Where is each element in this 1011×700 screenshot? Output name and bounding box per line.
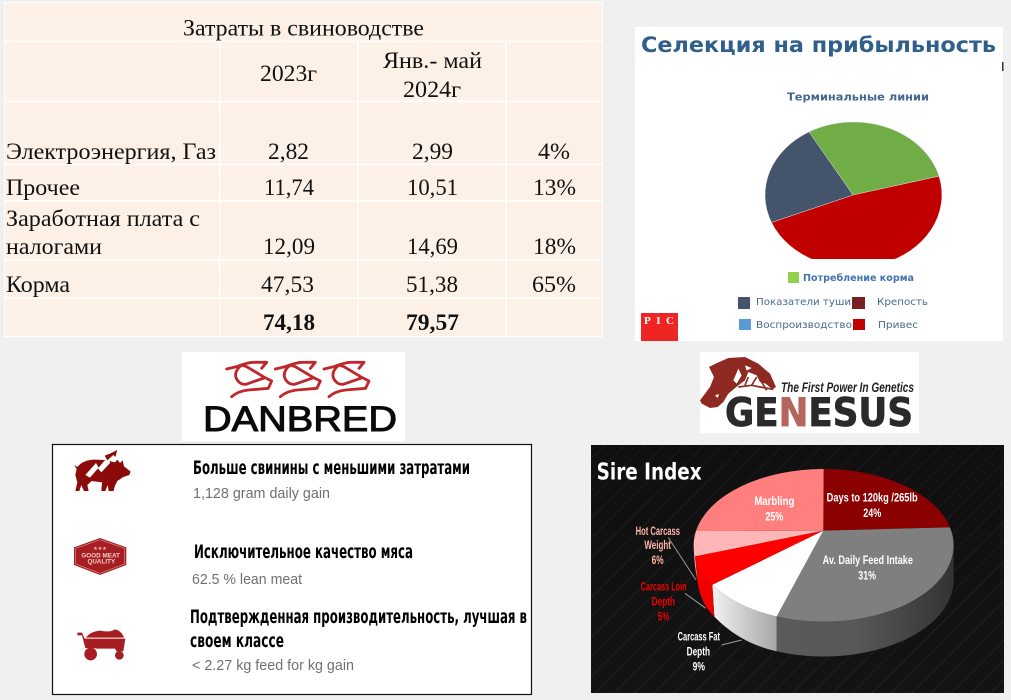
icon: PIC logo [641,313,678,341]
row: other: 10,51 [407,175,458,200]
row: electricity and gas: 4% [538,139,570,164]
row: totals: 74,18 [263,310,315,335]
row: wages with taxes: налогами [6,234,102,259]
row: electricity and gas: Электроэнергия, Газ [6,139,216,164]
legend: Крепость [877,297,928,308]
row: wages with taxes: Заработная плата с [6,206,200,231]
3D pie chart [694,469,954,656]
row: feed: 47,53 [261,272,314,297]
row: totals [263,310,459,335]
row: other: 13% [533,175,576,200]
metric: lean meat: 62.5 % lean meat [192,572,302,588]
label: carcass loin depth: Carcass Loin [641,580,687,594]
row: feed [6,272,576,297]
pie chart: terminal lines [765,122,942,268]
label: average daily feed intake: Av. Daily Feed Intake [823,553,913,567]
row: feed: Корма [6,272,70,297]
label: hot carcass weight [636,524,680,567]
panel: cost table [4,2,603,337]
icon: pig with growth arrow [74,450,131,491]
icon: good meat quality badge: GOOD MEAT [81,553,120,560]
label: days to 120kg [827,491,918,520]
heading: Sire Index: Sire Index [597,459,702,485]
icon: three red pig outlines [227,362,369,397]
row: electricity and gas [6,139,570,164]
heading: proven performance: Подтвержденная производительность, лучшая в [190,607,527,628]
label: marbling [754,494,794,523]
wordmark: DANBRED [203,400,397,439]
column header: January to May 2024 [383,48,482,102]
label: carcass fat depth: Carcass Fat [678,630,720,644]
icon: good meat quality badge: QUALITY [87,559,116,566]
heading: proven performance: своем классе [190,631,284,652]
label: days to 120kg: Days to 120kg /265lb [827,491,918,505]
icon: feed cart [77,629,125,660]
label: marbling: Marbling [754,494,794,508]
label: days to 120kg: 24% [863,506,882,520]
icon: boar head [700,357,776,408]
icon: PIC logo: PIC [644,315,674,327]
panel heading: Селекция на прибыльность [641,33,996,58]
label: carcass loin depth [641,580,687,623]
row: electricity and gas: 2,99 [412,139,453,164]
label: average daily feed intake: 31% [858,568,876,582]
heading: proven performance [190,607,527,652]
label: carcass fat depth: 9% [693,659,705,673]
label: carcass loin depth: Depth [652,595,675,609]
legend: Воспроизводство [756,320,852,331]
row: feed: 65% [532,272,576,297]
panel: Danbred benefits [52,444,532,694]
row: feed: 51,38 [406,272,458,297]
label: marbling: 25% [765,509,784,523]
icon: good meat quality badge: ★★★ [93,546,107,552]
table title: Затраты в свиноводстве [183,16,424,40]
panel: sire index [591,445,1004,693]
legend: Показатели туши [756,297,851,308]
leader lines [668,538,742,645]
label: carcass fat depth: Depth [687,644,710,658]
panel: selection for profitability [635,27,1004,341]
label: hot carcass weight: Hot Carcass [636,524,680,538]
label: hot carcass weight: 6% [652,553,664,567]
wordmark: GENESUS [725,391,913,436]
legend [738,272,928,331]
tagline: The First Power In Genetics [781,380,914,395]
row: other: Прочее [6,175,80,200]
label: carcass fat depth [678,630,720,673]
label: carcass loin depth: 5% [658,609,670,623]
metric: daily gain: 1,128 gram daily gain [193,486,330,502]
row: totals: 79,57 [406,310,459,335]
row: electricity and gas: 2,82 [268,139,309,164]
logo: Danbred [182,352,405,441]
metric: feed conversion: < 2.27 kg feed for kg gain [192,658,354,674]
label: hot carcass weight: Weight [644,538,671,552]
chart heading: Терминальные линии [787,92,929,104]
heading: more pork at lower cost: Больше свинины с меньшими затратами [193,458,470,479]
icon: good meat quality badge [74,538,126,575]
row: other [6,175,576,200]
row: wages with taxes: 12,09 [263,234,315,259]
column header: January to May 2024: 2024г [403,77,461,102]
column header: 2023: 2023г [260,61,317,86]
row: wages with taxes [6,206,576,259]
row: wages with taxes: 14,69 [407,234,458,259]
legend: Потребление корма [803,272,914,284]
heading: exceptional meat quality: Исключительное качество мяса [194,542,413,563]
row: other: 11,74 [264,175,314,200]
column header: January to May 2024: Янв.- май [383,48,482,73]
legend: Привес [878,320,918,331]
logo: Genesus [700,352,919,436]
label: average daily feed intake [823,553,913,582]
row: wages with taxes: 18% [533,234,576,259]
